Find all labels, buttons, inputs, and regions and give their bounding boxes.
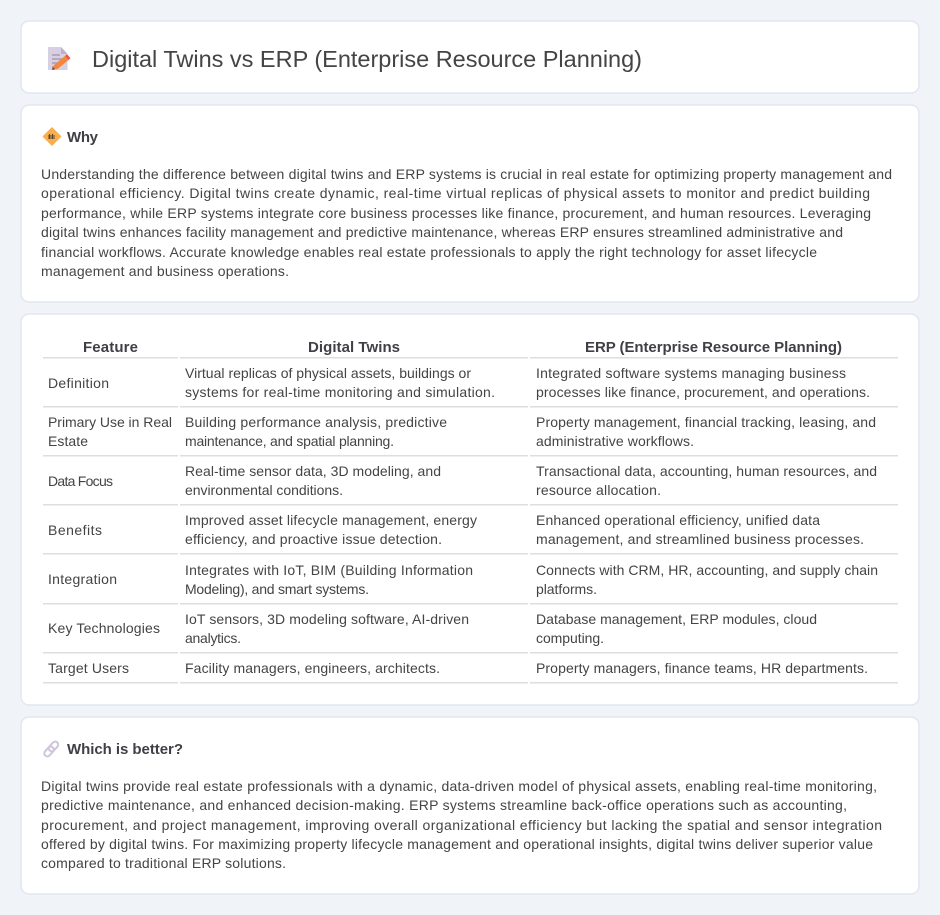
table header: ERP (Enterprise Resource Planning) <box>585 339 842 356</box>
row: benefits <box>48 512 864 547</box>
row: definition: systems for real-time monitoring and simulation. <box>185 384 495 400</box>
row: data focus: resource allocation. <box>536 482 661 498</box>
row: data focus: Data Focus <box>48 473 113 489</box>
row: definition: processes like finance, procurement, and operations. <box>536 384 870 400</box>
row: key technologies <box>48 611 817 646</box>
icon: document with pencil <box>48 47 70 70</box>
table header: Feature <box>83 339 138 356</box>
text block: which paragraph: predictive maintenance, and enhanced decision-making. ERP systems streamline back-office operations such as accounting, <box>41 797 847 813</box>
title: Digital Twins vs ERP (Enterprise Resource Planning) <box>92 46 642 72</box>
panel: which is better <box>21 717 919 894</box>
row: benefits: Benefits <box>48 522 102 538</box>
row: key technologies: analytics. <box>185 630 241 646</box>
row: data focus: environmental conditions. <box>185 482 343 498</box>
row: definition <box>48 365 870 400</box>
row: key technologies: computing. <box>536 630 604 646</box>
panel: comparison table <box>21 314 919 705</box>
text block: which paragraph: procurement, and project management, improving overall organizational efficiency but lacking the spatial and sensor integration <box>41 817 882 833</box>
row: target users: Property managers, finance teams, HR departments. <box>536 660 868 676</box>
row: data focus <box>48 463 877 498</box>
row: definition: Definition <box>48 375 109 391</box>
row: primary use: Property management, financial tracking, leasing, and <box>536 414 876 430</box>
row: key technologies: Database management, ERP modules, cloud <box>536 611 817 627</box>
panel: why <box>21 105 919 302</box>
row: definition: Integrated software systems managing business <box>536 365 846 381</box>
row: key technologies: IoT sensors, 3D modeling software, AI-driven <box>185 611 469 627</box>
row: primary use: Primary Use in Real <box>48 414 172 430</box>
text block: why paragraph: operational efficiency. Digital twins create dynamic, real-time virtual replicas of physical assets to monitor and predict building <box>41 185 870 201</box>
row: target users <box>48 660 868 676</box>
text block: which paragraph <box>41 778 882 871</box>
table header: Digital Twins <box>308 339 400 356</box>
row: integration: platforms. <box>536 581 597 597</box>
row: target users: Target Users <box>48 660 129 676</box>
text block: why paragraph: financial workflows. Accurate knowledge enables real estate professionals to apply the right technology for asset lifecycle <box>41 244 817 260</box>
row: benefits: efficiency, and proactive issue detection. <box>185 531 442 547</box>
text block: why paragraph: Understanding the difference between digital twins and ERP systems is crucial in real estate for optimizing property management and <box>41 166 892 182</box>
icon: diamond sign <box>44 128 60 145</box>
icon: chain link <box>43 740 59 758</box>
row: integration: Connects with CRM, HR, accounting, and supply chain <box>536 562 878 578</box>
text block: which paragraph: Digital twins provide real estate professionals with a dynamic, data-driven model of physical assets, enabling real-time monitoring, <box>41 778 877 794</box>
row: primary use: Building performance analysis, predictive <box>185 414 447 430</box>
text block: why paragraph: digital twins enhances facility management and predictive maintenance, whereas ERP ensures streamlined administrative and <box>41 224 843 240</box>
heading: which is better: Which is better? <box>67 741 183 758</box>
row: primary use: administrative workflows. <box>536 433 694 449</box>
row: integration: Integration <box>48 571 117 587</box>
row: benefits: management, and streamlined business processes. <box>536 531 864 547</box>
row: integration: Modeling), and smart systems. <box>185 581 369 597</box>
row: data focus: Real-time sensor data, 3D modeling, and <box>185 463 441 479</box>
panel: title header <box>21 21 919 93</box>
row: benefits: Enhanced operational efficiency, unified data <box>536 512 820 528</box>
text block: why paragraph <box>41 166 892 279</box>
row: key technologies: Key Technologies <box>48 620 160 636</box>
row: benefits: Improved asset lifecycle management, energy <box>185 512 477 528</box>
text block: why paragraph: performance, while ERP systems integrate core business processes like finance, procurement, and human resources. Leveraging <box>41 205 871 221</box>
row: integration: Integrates with IoT, BIM (Building Information <box>185 562 473 578</box>
text block: which paragraph: compared to traditional ERP solutions. <box>41 855 286 871</box>
text block: which paragraph: offered by digital twins. For maximizing property lifecycle management and operational insights, digital twins deliver superior value <box>41 836 873 852</box>
row: primary use: Estate <box>48 433 88 449</box>
row: target users: Facility managers, engineers, architects. <box>185 660 440 676</box>
row: integration <box>48 562 878 597</box>
heading: why: Why <box>67 129 99 146</box>
text block: why paragraph: management and business operations. <box>41 263 289 279</box>
row: primary use <box>48 414 876 449</box>
table header <box>83 339 842 356</box>
row: primary use: maintenance, and spatial planning. <box>185 433 394 449</box>
row: data focus: Transactional data, accounting, human resources, and <box>536 463 877 479</box>
row: definition: Virtual replicas of physical assets, buildings or <box>185 365 471 381</box>
